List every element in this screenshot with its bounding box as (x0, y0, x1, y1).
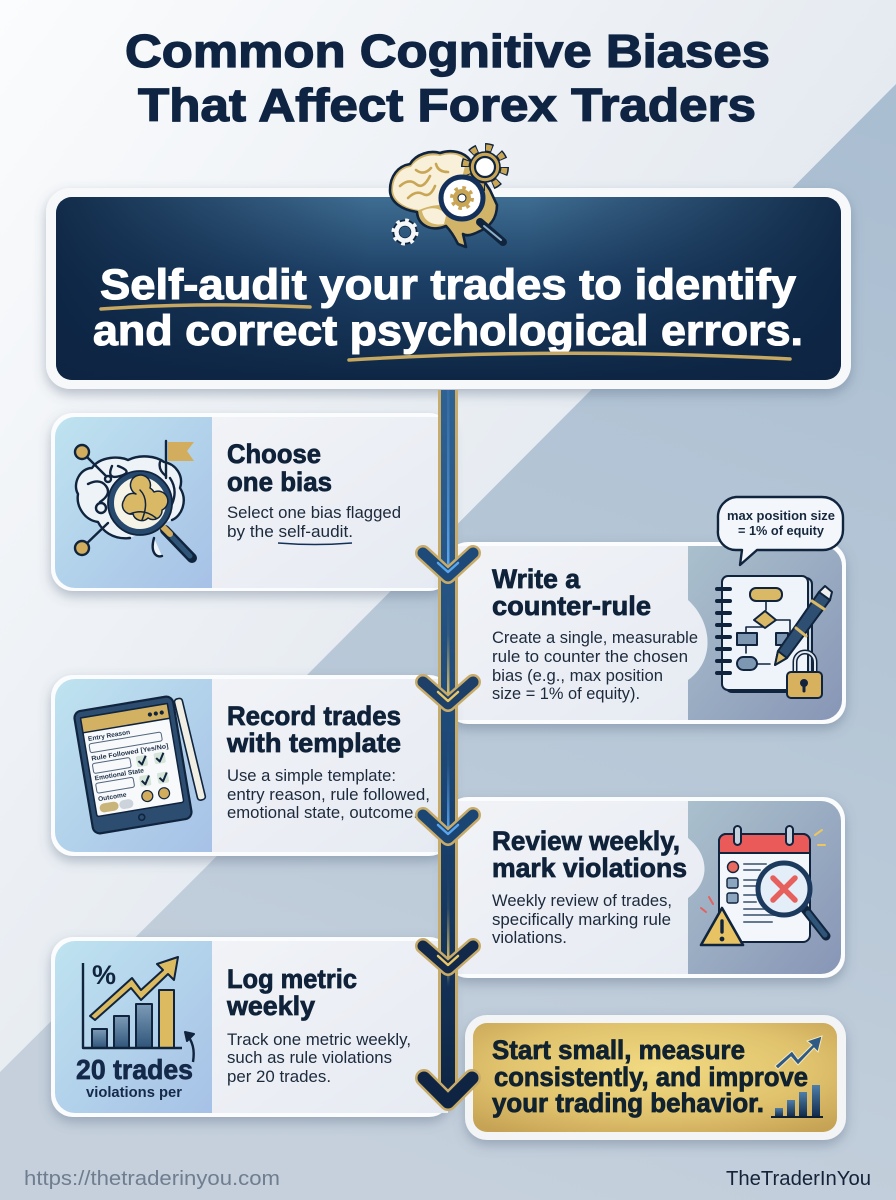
heading (226, 701, 401, 758)
conclusion text: Start small, measure (492, 1035, 745, 1065)
description: violations. (492, 929, 567, 947)
title: Common Cognitive Biases (125, 25, 770, 77)
conclusion text: consistently, and improve (494, 1062, 808, 1092)
heading: weekly (226, 991, 315, 1021)
panel: step 3 record trades (51, 675, 451, 856)
panel: step 4 review weekly (446, 797, 845, 978)
icon: bar chart with rising arrow (83, 957, 194, 1062)
heading (492, 826, 687, 883)
description (227, 767, 430, 822)
icon: tablet with template (73, 693, 209, 834)
description (227, 1031, 411, 1086)
title (125, 25, 770, 131)
description: bias (e.g., max position (492, 667, 663, 685)
description: rule to counter the chosen (492, 648, 688, 666)
heading: mark violations (492, 853, 687, 883)
callout: max position size (718, 497, 843, 565)
description: Weekly review of trades, (492, 892, 672, 910)
conclusion text: your trading behavior. (492, 1088, 764, 1118)
description (227, 504, 401, 544)
icon: brain with gears and magnifier (390, 148, 504, 247)
metric label: violations per (86, 1085, 182, 1101)
icon: notebook, pen and lock (717, 576, 832, 698)
description: Track one metric weekly, (227, 1031, 411, 1049)
icon: tablet with template: Entry Reason (88, 729, 131, 743)
metric label: 20 trades (76, 1054, 193, 1085)
description (492, 629, 698, 703)
heading: Choose (227, 439, 321, 469)
icon: rising arrow (775, 1036, 822, 1069)
description: Select one bias flagged (227, 504, 401, 522)
arrow: timeline spine (423, 390, 473, 1105)
description: such as rule violations (227, 1049, 392, 1067)
description: size = 1% of equity). (492, 685, 640, 703)
metric label (76, 1054, 193, 1101)
icon: tablet with template: Emotional State (94, 767, 145, 782)
heading: counter-rule (492, 591, 651, 621)
heading: Log metric (227, 964, 357, 994)
description: by the self-audit. (227, 523, 353, 541)
headline text: Self-audit your trades to identify (100, 261, 796, 309)
heading: one bias (227, 467, 332, 497)
icon: tablet with template: Rule Followed [Yes/No] (91, 743, 169, 763)
icon: brain under magnifier (75, 441, 194, 558)
callout: max position size: max position size (727, 508, 835, 523)
heading (226, 964, 357, 1021)
heading (227, 439, 332, 497)
footer brand: TheTraderInYou (726, 1168, 871, 1190)
footer url: https://thetraderinyou.com (24, 1167, 280, 1190)
icon: calendar with warning and magnifier (701, 826, 826, 945)
callout: max position size: = 1% of equity (738, 523, 825, 538)
description: Use a simple template: (227, 767, 396, 785)
panel: step 5 log metric (51, 937, 451, 1117)
icon: tablet with template: Outcome (98, 791, 127, 803)
description: specifically marking rule (492, 911, 671, 929)
headline text: and correct psychological errors. (93, 307, 803, 355)
panel: step 2 write a counter-rule (446, 497, 846, 724)
heading: with template (226, 728, 401, 758)
icon: small bars (771, 1085, 823, 1118)
icon: bar chart with rising arrow: % (92, 960, 116, 990)
headline text (93, 261, 803, 360)
panel: conclusion (465, 1015, 846, 1140)
heading: Review weekly, (492, 826, 680, 856)
description: emotional state, outcome. (227, 804, 418, 822)
description: Create a single, measurable (492, 629, 698, 647)
panel: headline banner (46, 188, 851, 389)
panel: step 1 choose one bias (51, 413, 451, 591)
heading: Write a (492, 564, 581, 594)
heading: Record trades (227, 701, 401, 731)
conclusion text (492, 1035, 808, 1118)
description: per 20 trades. (227, 1068, 331, 1086)
description (492, 892, 672, 947)
title: That Affect Forex Traders (138, 79, 756, 131)
description: entry reason, rule followed, (227, 786, 430, 804)
heading (492, 564, 651, 621)
